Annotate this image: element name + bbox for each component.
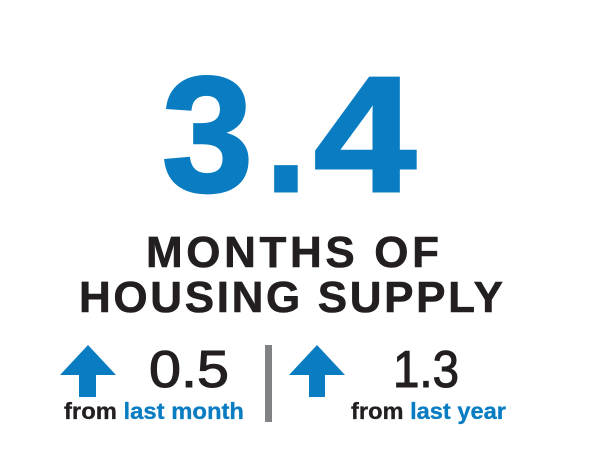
heading: months of housing supply: MONTHS OF <box>146 228 439 277</box>
heading: months of housing supply <box>79 228 503 322</box>
value: 1.3: 1.3 <box>393 341 459 399</box>
big number: 3.4 <box>162 43 416 226</box>
stat: last year <box>289 341 506 424</box>
heading: months of housing supply: HOUSING SUPPLY <box>79 273 503 322</box>
icon: up arrow, last month <box>60 345 116 397</box>
big number: 3.4: . <box>266 43 306 226</box>
label: from last year: from last year <box>351 398 506 424</box>
big number: 3.4: 3 <box>162 43 253 226</box>
big number: 3.4: 4 <box>314 43 416 226</box>
icon: up arrow, last year <box>289 345 345 397</box>
value: 0.5: 0.5 <box>149 341 229 399</box>
label: from last month: from last month <box>64 398 244 424</box>
divider <box>265 345 272 422</box>
stat: last month <box>60 341 244 424</box>
